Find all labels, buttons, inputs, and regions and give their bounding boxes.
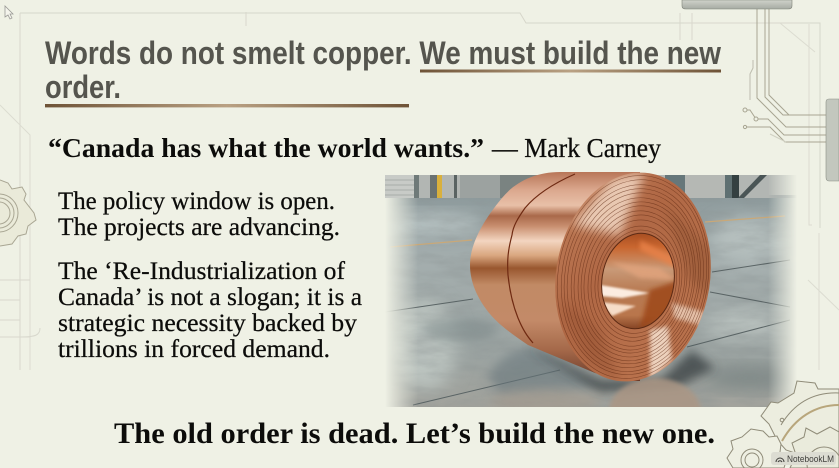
- text block: re-industrialization: [58, 256, 362, 363]
- icon: left gear: [0, 180, 36, 246]
- text block: re-industrialization: The ‘Re-Industrialization of: [58, 256, 345, 285]
- floor reflection: [513, 376, 700, 407]
- title: Words do not smelt copper. We must build the new: [45, 35, 721, 71]
- coil front face: [555, 172, 711, 382]
- quote: — Mark Carney: [491, 133, 661, 163]
- photo: copper coil in factory: [385, 172, 796, 407]
- quote: “Canada has what the world wants.”: [48, 132, 484, 163]
- badge: NotebookLM: [771, 452, 836, 465]
- coil hollow core: [602, 234, 674, 328]
- text block: re-industrialization: Canada’ is not a slogan; it is a: [58, 282, 362, 311]
- circuit frame decoration: [0, 12, 839, 370]
- icon: copper tracks and top metal plate: [682, 0, 826, 142]
- coil shadow: [488, 345, 715, 394]
- text block: policy window: The policy window is open.: [58, 186, 335, 215]
- coil seam: [508, 174, 575, 343]
- icon: bottom right gears: [727, 381, 839, 468]
- factory floor: [380, 195, 800, 410]
- large gear: [761, 381, 839, 468]
- icon: right metal plate: [826, 99, 839, 181]
- icon: cursor arrow: [5, 6, 13, 19]
- text block: re-industrialization: strategic necessity backed by: [58, 308, 357, 337]
- text block: policy window: [58, 186, 340, 241]
- small gear: [727, 429, 786, 468]
- title: order.: [45, 69, 121, 105]
- factory back wall: [380, 175, 800, 198]
- title underlines: [45, 70, 721, 107]
- right gear: [790, 427, 839, 468]
- title: [45, 35, 721, 105]
- coil body: [470, 172, 640, 381]
- closing statement: The old order is dead. Let’s build the new one.: [114, 418, 715, 450]
- copper coil: [470, 172, 711, 382]
- text block: re-industrialization: trillions in forced demand.: [58, 334, 330, 363]
- text block: policy window: The projects are advancing.: [58, 212, 340, 241]
